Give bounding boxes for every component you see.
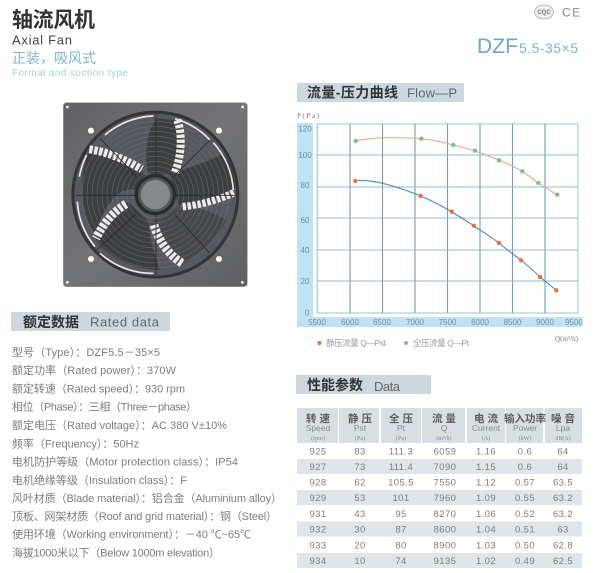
rated data list: 顶板、网架材质（Roof and grid material）：钢（Steel） [12,509,277,523]
rated data list: 额定电压（Rated voltage）：AC 380 V±10% [12,418,227,432]
table header: 电 流 [474,412,498,425]
table rows: 6059 [434,446,456,458]
table rows: 1.16 [476,446,496,458]
y-axis labels: 60 [301,216,310,225]
table rows: 931 [309,509,327,520]
table row stripes [297,459,582,568]
heading: performance data [296,375,431,394]
performance table [297,408,582,568]
table rows: 80 [395,540,407,552]
x-axis labels: 5500 [308,318,326,327]
rated data list: 相位（Phase）：三相（Three－phase） [12,400,197,414]
table header: Power [513,423,537,433]
table header: 静 压 [348,412,372,425]
icon: CQC certification badge [534,5,554,19]
table rows: 64 [557,446,569,458]
table rows: 7550 [434,478,456,488]
x-axis title: Q(m³/h) [555,335,579,343]
table rows: 87 [395,524,407,536]
table header: Lpa [556,423,570,433]
table header: Speed [306,423,331,433]
rated data list: 电机防护等级（Motor protection class）：IP54 [12,454,238,468]
model number: 5.5-35×5 [519,40,578,56]
table rows: 934 [309,556,327,567]
table rows: 925 [309,446,327,458]
title block: Formal and suction type [12,68,128,79]
table rows: 8900 [434,540,456,552]
table header: (m³/h) [436,435,452,442]
table rows: 20 [354,540,366,552]
table rows: 1.09 [476,493,496,504]
table rows: 927 [309,462,327,473]
table rows: 62.5 [553,556,573,567]
table rows: 95 [395,509,407,520]
heading: flow-pressure curve: Flow—P [407,86,457,100]
model number: DZF [477,35,518,58]
table rows: 929 [309,493,327,504]
blades [82,118,235,270]
model number [477,35,578,58]
table rows: 63.2 [553,509,573,520]
table header: 全 压 [389,412,413,425]
x-axis labels: 9000 [536,318,554,327]
y-axis labels: 120 [298,124,312,134]
legend: 静压流量 Q—Pst [326,338,387,348]
rated data list: 使用环境（Working environment）：－40 ℃~65℃ [12,527,251,541]
table rows: 933 [309,540,327,552]
table rows: 1.15 [476,462,496,473]
table rows: 63 [557,524,569,536]
table rows: 0.51 [515,524,535,536]
table rows: 932 [309,524,327,536]
table rows: 105.5 [388,478,414,488]
heading: rated data: 额定数据 [23,314,79,330]
legend [318,338,470,348]
rated data list: 风叶材质（Blade material）：铝合金（Aluminium alloy） [12,491,282,505]
table header: 流 量 [432,412,456,425]
icon: CE mark: CE [562,6,582,20]
table rows: 0.57 [515,478,535,488]
y-axis labels: 80 [301,181,310,190]
table rows: 1.02 [476,556,496,567]
table rows: 10 [354,556,366,567]
table rows: 1.04 [476,524,496,536]
table rows: 101 [392,493,410,504]
x-axis labels [308,318,583,327]
y-axis labels: 20 [301,277,310,286]
table rows: 8270 [434,509,456,520]
heading: rated data: Rated data [90,314,160,330]
table rows: 111.3 [389,446,413,458]
table rows: 74 [395,556,407,567]
table header: Current [472,423,501,433]
title block: 正装，吸风式 [12,50,96,66]
rated data list: 电机绝缘等级（Insulation class）：F [12,473,187,487]
table rows: 83 [354,446,366,458]
x-axis labels: 8000 [471,318,489,327]
x-axis labels: 8500 [504,318,522,327]
heading: flow-pressure curve [297,83,464,102]
table rows: 64 [557,462,569,473]
table header: dB(A) [555,435,571,442]
rated data list: 海拔1000米以下（Below 1000m elevation） [12,546,220,560]
curve: static pressure Q-Pst [353,179,558,292]
table rows: 0.49 [515,556,535,567]
x-axis labels: 9500 [565,318,583,327]
x-axis labels: 7500 [439,318,457,327]
rated data list [12,345,282,560]
table header: Q [441,423,448,433]
y-axis labels: 0 [305,308,310,318]
table rows: 43 [354,509,366,520]
table rows: 0.6 [518,462,532,473]
table rows: 9135 [434,556,456,567]
table rows: 1.06 [476,509,496,520]
y-axis labels: 100 [298,151,312,160]
table header: Pst [354,423,367,433]
table rows: 1.03 [476,540,496,552]
chart: flow-pressure curves [297,112,583,348]
heading: performance data: Data [374,379,401,394]
table rows: 63.5 [553,478,573,488]
table rows: 1.12 [476,478,496,488]
axis band [297,123,582,327]
table rows: 7090 [434,462,456,473]
table rows: 7960 [434,493,456,504]
table header: (kW) [519,435,531,442]
table rows: 0.52 [515,509,535,520]
table rows: 111.4 [389,462,413,473]
fan photo illustration [63,103,247,287]
title block: Axial Fan [12,32,72,48]
table rows: 62 [354,478,366,488]
table rows: 0.50 [515,540,535,552]
table header: (Pa) [355,435,365,442]
table header: 噪 音 [551,412,575,425]
y-axis title: P(Pa) [297,112,320,120]
table rows [309,446,573,567]
title block: 轴流风机 [12,9,95,32]
rated data list: 额定功率（Rated power）：370W [12,363,177,377]
table header: (A) [482,435,490,442]
table rows: 30 [354,524,366,536]
table rows: 73 [354,462,366,473]
rated data list: 频率（Frequency）：50Hz [12,436,139,450]
table header: (Pa) [396,435,406,442]
table rows: 62.8 [553,540,573,552]
table rows: 0.6 [518,446,532,458]
heading: rated data [11,312,170,331]
table header: 转 速 [306,412,330,425]
table header: 输入功率 [504,412,546,425]
table rows: 0.55 [515,493,535,504]
icon: CQC certification badge: CQC [537,10,551,16]
legend: 全压流量 Q—Pt [413,338,470,348]
x-axis labels: 6000 [341,318,359,327]
x-axis labels: 6500 [373,318,391,327]
table rows: 63.2 [553,493,573,504]
table rows: 53 [354,493,366,504]
curve: total pressure Q-Pt [354,136,560,197]
y-axis labels [298,124,312,318]
table header: (rpm) [311,435,325,442]
heading: performance data: 性能参数 [307,377,363,393]
rated data list: 型号（Type）：DZF5.5－35×5 [12,345,160,359]
x-axis labels: 7000 [406,318,424,327]
y-axis labels: 40 [301,246,310,255]
table rows: 8600 [434,524,456,536]
table header: Pt [397,423,406,433]
table rows: 928 [309,478,327,488]
rated data list: 额定转速（Rated speed）：930 rpm [12,382,185,396]
title block [12,9,128,79]
table header [297,408,582,443]
heading: flow-pressure curve: 流量-压力曲线 [307,84,398,100]
